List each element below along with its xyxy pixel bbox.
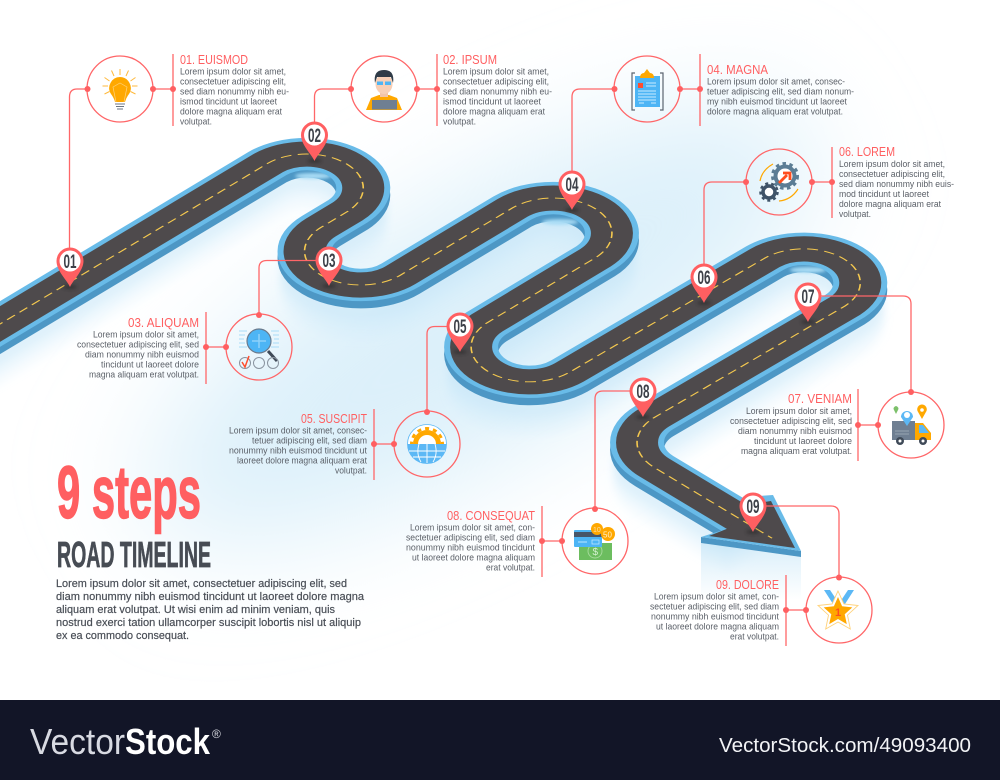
heading 04: 04. MAGNA: [707, 63, 769, 77]
text block 02: Lorem ipsum dolor sit amet,: [443, 66, 549, 78]
connector 01: [70, 89, 87, 248]
heading 09: 09. DOLORE: [716, 578, 779, 592]
text block 09: sectetuer adipiscing elit, sed diam: [650, 601, 779, 612]
text block 08: Lorem ipsum dolor sit amet, con-: [410, 523, 535, 534]
icon: card, cash and coins: $: [592, 547, 598, 558]
heading 08: 08. CONSEQUAT: [447, 509, 535, 523]
icon: delivery truck: [892, 405, 931, 445]
inner curve highlights: [295, 173, 826, 273]
pin 05: 05: [454, 317, 467, 338]
text block 01: dolore magna aliquam erat: [180, 106, 282, 118]
text block 05: volutpat.: [335, 466, 367, 476]
text block 05: nonummy nibh euismod tincidunt ut: [229, 446, 367, 456]
text block 05: Lorem ipsum dolor sit amet, consec-: [229, 426, 367, 436]
text block 01: [180, 66, 289, 128]
icon: card, cash and coins: 10: [593, 527, 601, 534]
footer logo: [30, 721, 221, 762]
road rim: [0, 154, 860, 522]
text block 09: erat volutpat.: [730, 632, 779, 642]
arrow rim: [701, 495, 801, 551]
icon: globe with gear: [408, 424, 446, 464]
text block 08: erat volutpat.: [486, 563, 535, 574]
intro paragraph: ex ea commodo consequat.: [56, 630, 189, 642]
text block 03: diam nonummy nibh euismod: [85, 350, 199, 360]
intro paragraph: aliquam erat volutpat. Ut wisi enim ad minim veniam, quis: [56, 604, 335, 616]
footer reference number: VectorStock.com/49093400: [719, 735, 971, 757]
text block 01: ismod tincidunt ut laoreet: [180, 96, 277, 108]
text block 04: tetuer adipiscing elit, sed diam nonum-: [707, 86, 854, 98]
icon: card, cash and coins: 50: [603, 530, 612, 540]
connector 03: [259, 260, 318, 315]
heading 07: 07. VENIAM: [788, 392, 852, 406]
step 07: [730, 296, 944, 461]
heading 02: 02. IPSUM: [443, 53, 497, 67]
icon: magnifier and checklist: [239, 329, 279, 368]
connector 04: [572, 89, 614, 171]
text block 07: diam nonummy nibh euismod: [738, 426, 852, 437]
pin 01: 01: [64, 252, 77, 273]
connector 05: [427, 326, 448, 412]
text block 09: [650, 591, 779, 642]
text block 06: [839, 159, 954, 220]
circle 02: [351, 56, 417, 122]
pin 02: [301, 122, 328, 164]
step 01: [70, 53, 289, 248]
text block 01: consectetuer adipiscing elit,: [180, 76, 286, 88]
text block 03: Lorem ipsum dolor sit amet,: [93, 330, 199, 340]
footer banner: [0, 700, 1000, 780]
icon: light bulb: [102, 69, 138, 109]
text block 01: Lorem ipsum dolor sit amet,: [180, 66, 286, 78]
icon: gears: [760, 164, 798, 201]
centre dashes: [0, 154, 860, 538]
step 09: [650, 506, 872, 646]
pin 01: [56, 248, 84, 290]
pin 09: [740, 492, 766, 534]
intro paragraph: diam nonummy nibh euismod tincidunt ut laoreet dolore magna: [56, 591, 365, 603]
circle 08: [562, 508, 628, 574]
step 05: [229, 326, 460, 480]
road timeline: [0, 154, 860, 600]
pin 03: [316, 246, 342, 288]
circle 09: [806, 577, 872, 643]
icon: star medal: 1: [835, 607, 841, 619]
arrow head asphalt: [709, 501, 795, 548]
text block 06: volutpat.: [839, 209, 871, 220]
icon: card, cash and coins: [574, 523, 615, 560]
circle 07: [878, 392, 944, 458]
text block 03: tincidunt ut laoreet dolore: [101, 360, 199, 370]
text block 02: volutpat.: [443, 116, 476, 128]
heading 05: 05. SUSCIPIT: [301, 412, 367, 426]
pin 07: 07: [802, 287, 814, 308]
connector 08: [595, 391, 632, 509]
intro paragraph: [56, 578, 365, 642]
text block 02: dolore magna aliquam erat: [443, 106, 545, 118]
text block 05: [229, 426, 367, 476]
connector 09: [765, 506, 839, 577]
text block 01: volutpat.: [180, 116, 212, 128]
pin 08: [630, 378, 656, 420]
step 02: [314, 53, 552, 128]
pin 03: 03: [322, 251, 336, 272]
text block 03: [77, 330, 199, 380]
step 08: [406, 391, 632, 577]
pin 09: 09: [746, 497, 760, 518]
pin 04: [558, 170, 586, 212]
text block 02: ismod tincidunt ut laoreet: [443, 96, 541, 108]
text block 06: sed diam nonummy nibh euis-: [839, 179, 954, 190]
footer logo: Vector: [30, 721, 125, 762]
text block 08: ut laoreet dolore magna aliquam: [412, 553, 535, 564]
connector 02: [314, 89, 351, 123]
text block 06: Lorem ipsum dolor sit amet,: [839, 159, 945, 170]
map pins: [56, 122, 822, 534]
circle 06: [746, 149, 812, 215]
arrow shadow: [701, 543, 801, 600]
title: 9 steps: [57, 451, 201, 534]
circle 03: [226, 314, 292, 380]
text block 07: magna aliquam erat volutpat.: [741, 446, 852, 457]
circle 05: [394, 411, 460, 477]
circle 04: [614, 56, 680, 122]
pin 06: [690, 264, 718, 306]
text block 06: dolore magna aliquam erat: [839, 199, 941, 210]
step 04: [572, 54, 854, 171]
icon: person at laptop: [366, 70, 402, 110]
pin 04: 04: [566, 175, 579, 196]
pin 08: 08: [636, 382, 650, 403]
heading 06: 06. LOREM: [839, 145, 895, 159]
heading 01: 01. EUISMOD: [180, 53, 248, 67]
text block 04: Lorem ipsum dolor sit amet, consec-: [707, 76, 845, 88]
text block 07: [730, 406, 852, 457]
text block 01: sed diam nonummy nibh eu-: [180, 86, 289, 98]
pin 05: [446, 312, 474, 354]
text block 04: [707, 76, 854, 118]
intro paragraph: Lorem ipsum dolor sit amet, consectetuer adipiscing elit, sed: [56, 578, 347, 590]
icon: star medal: [818, 590, 858, 629]
pin 02: 02: [308, 126, 321, 147]
text block 07: Lorem ipsum dolor sit amet,: [746, 406, 852, 417]
step 03: [77, 260, 318, 384]
text block 02: [443, 66, 552, 128]
asphalt: [0, 154, 860, 522]
circle 01: [87, 56, 153, 122]
text block 05: tetuer adipiscing elit, sed diam: [252, 436, 367, 446]
connector 07: [820, 296, 911, 392]
subtitle: ROAD TIMELINE: [57, 534, 211, 575]
connector 06: [704, 182, 746, 264]
text block 08: [406, 523, 535, 574]
text block 04: dolore magna aliquam erat volutpat.: [707, 106, 843, 118]
icon: clipboard: [632, 69, 663, 110]
footer logo: ®: [212, 727, 221, 741]
text block 03: consectetuer adipiscing elit, sed: [77, 340, 199, 350]
text block 07: consectetuer adipiscing elit, sed: [730, 416, 852, 427]
text block 05: laoreet dolore magna aliquam erat: [237, 456, 367, 466]
text block 04: my nibh euismod tincidunt ut laoreet: [707, 96, 847, 108]
text block 06: mod tincidunt ut laoreet: [839, 189, 929, 200]
text block 09: Lorem ipsum dolor sit amet, con-: [654, 591, 779, 602]
text block 08: nonummy nibh euismod tincidunt: [406, 543, 535, 554]
road shadow: [0, 173, 860, 562]
text block 03: magna aliquam erat volutpat.: [89, 370, 199, 380]
arrow side wall: [701, 537, 801, 557]
pin 06: 06: [698, 268, 710, 289]
road side wall: [0, 161, 860, 529]
text block 02: consectetuer adipiscing elit,: [443, 76, 549, 88]
step 06: [704, 145, 954, 264]
text block 09: ut laoreet dolore magna aliquam: [656, 622, 779, 632]
intro paragraph: nostrud exerci tation ullamcorper suscipit lobortis nisl ut aliquip: [56, 617, 361, 629]
text block 06: consectetuer adipiscing elit,: [839, 169, 945, 180]
text block 02: sed diam nonummy nibh eu-: [443, 86, 552, 98]
text block 08: sectetuer adipiscing elit, sed diam: [406, 533, 535, 544]
footer logo: Stock: [125, 721, 211, 762]
heading 03: 03. ALIQUAM: [128, 316, 199, 330]
pin 07: [794, 282, 822, 324]
text block 07: tincidunt ut laoreet dolore: [754, 436, 852, 447]
text block 09: nonummy nibh euismod tincidunt: [651, 611, 779, 622]
